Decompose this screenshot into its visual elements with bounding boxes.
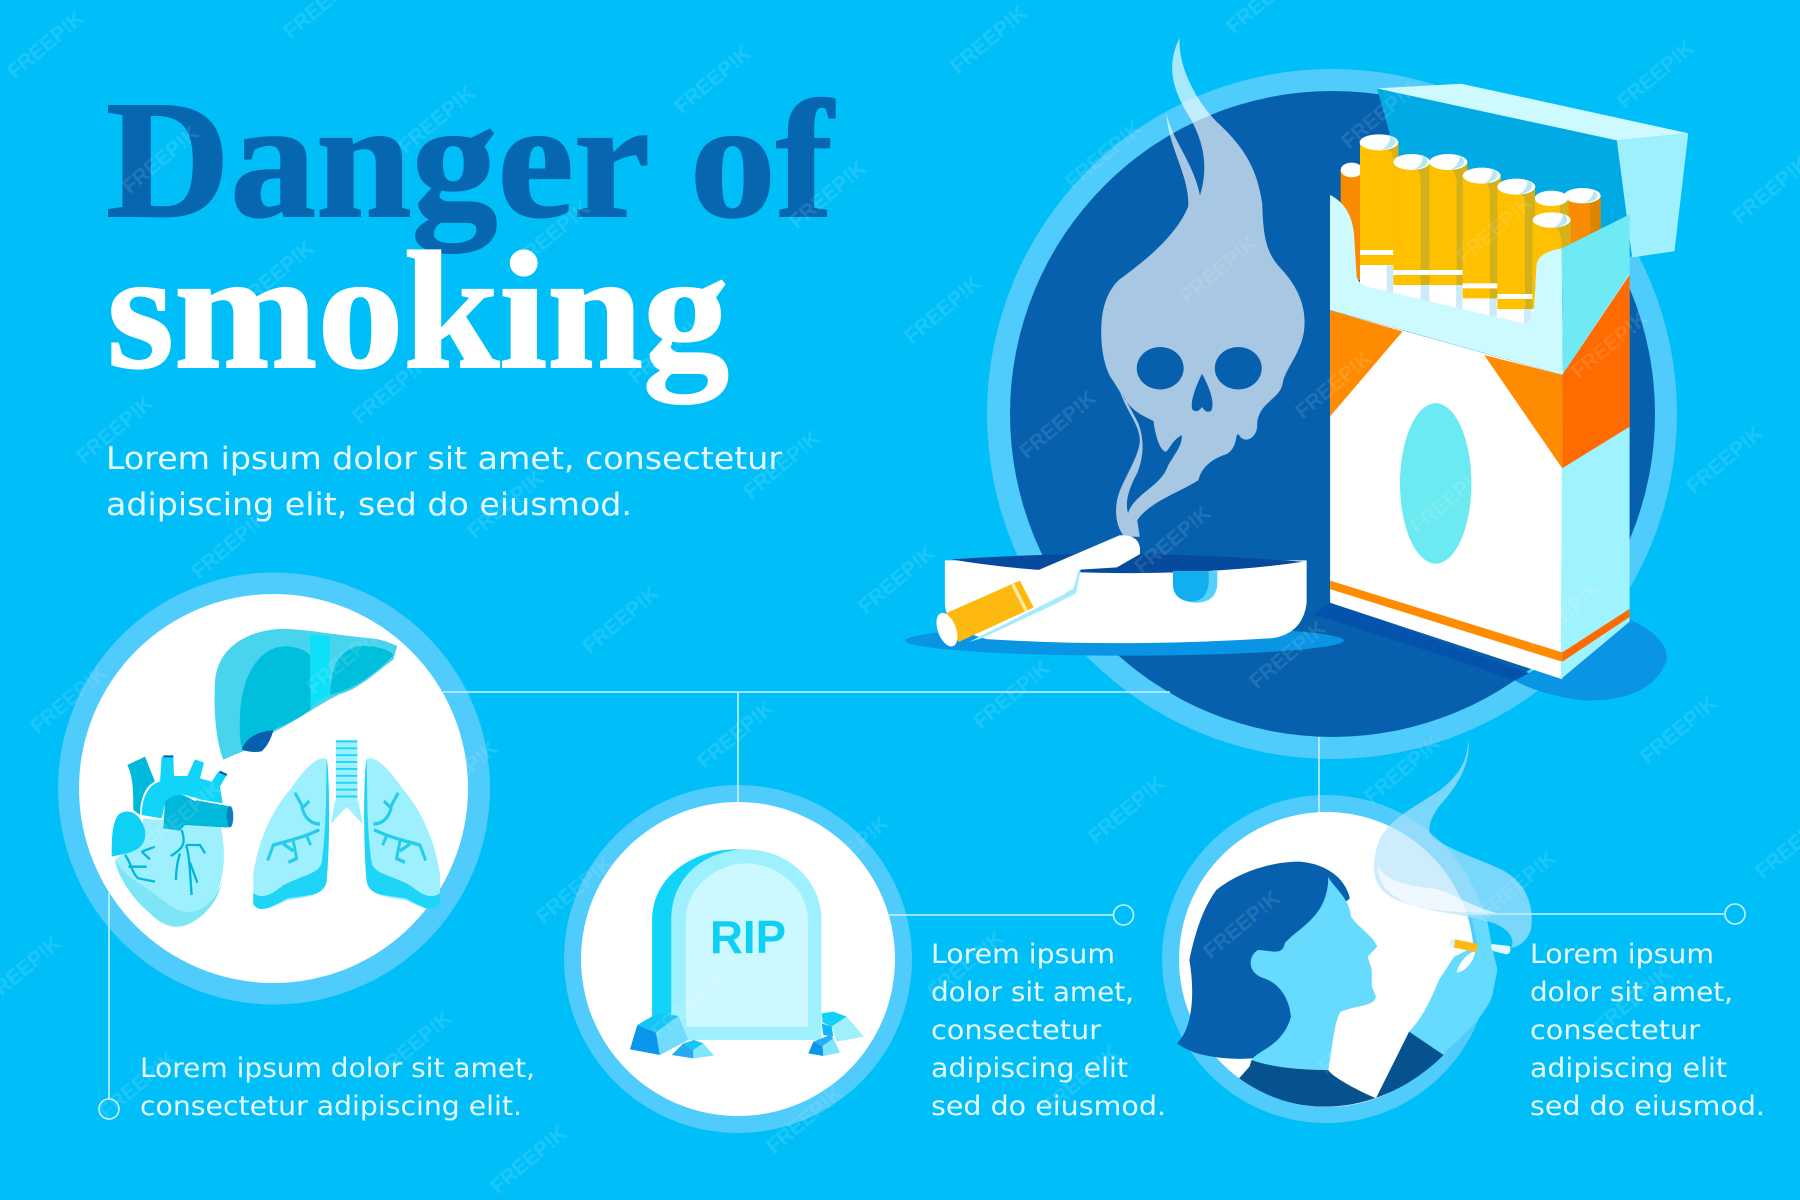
main circle	[987, 69, 1677, 759]
watermarks: FREEP!K	[946, 2, 1032, 78]
title	[106, 67, 835, 404]
RIP label: RIP	[710, 911, 786, 963]
watermarks: FREEP!K	[1061, 117, 1147, 193]
text block: gravestone: adipiscing elit	[931, 1053, 1128, 1084]
watermarks: FREEP!K	[854, 542, 940, 618]
watermarks: FREEP!K	[1452, 192, 1538, 268]
watermarks: FREEP!K	[95, 1047, 181, 1123]
watermarks: FREEP!K	[739, 427, 825, 503]
pack front face	[1330, 310, 1562, 679]
hair	[1177, 862, 1350, 1059]
text block: gravestone	[931, 939, 1166, 1122]
panel: gravestone	[564, 785, 912, 1133]
title line: Danger of: Danger of	[106, 67, 835, 253]
organs circle	[58, 572, 490, 1004]
watermarks: FREEP!K	[762, 1082, 848, 1158]
watermarks: FREEP!K	[141, 777, 227, 853]
skull gaps	[1122, 393, 1182, 513]
icon: gravestone	[652, 849, 821, 1040]
watermarks: FREEP!K	[72, 392, 158, 468]
watermarks: FREEP!K	[26, 662, 112, 738]
pack oval	[1400, 403, 1471, 564]
watermarks: FREEP!K	[486, 1122, 572, 1198]
watermarks: FREEP!K	[417, 737, 503, 813]
smoke skull	[1101, 38, 1305, 537]
orange stripe	[1330, 581, 1562, 662]
watermarks: FREEP!K	[624, 312, 710, 388]
watermarks: FREEP!K	[1038, 1042, 1124, 1118]
pack front flap	[1330, 195, 1563, 375]
face	[1251, 877, 1377, 1070]
text block: gravestone: Lorem ipsum	[931, 939, 1115, 970]
intro text	[106, 441, 782, 523]
watermarks: FREEP!K	[1337, 77, 1423, 153]
ashtray shadow	[905, 625, 1344, 656]
text block: smoker: sed do eiusmod.	[1530, 1091, 1765, 1122]
text block: smoker: Lorem ipsum	[1530, 939, 1714, 970]
smoke from cigarette	[1374, 740, 1532, 948]
watermarks: FREEP!K	[1682, 422, 1768, 498]
intro text: Lorem ipsum dolor sit amet, consectetur	[106, 441, 782, 477]
pack lid	[1377, 84, 1688, 140]
watermarks: FREEP!K	[118, 122, 204, 198]
text block: smoker: adipiscing elit	[1530, 1053, 1727, 1084]
watermarks: FREEP!K	[1314, 1002, 1400, 1078]
text block: organs: Lorem ipsum dolor sit amet,	[140, 1053, 535, 1084]
smoker circle	[1162, 795, 1490, 1123]
main illustration: smoke skull, ashtray and cigarette pack	[905, 38, 1688, 759]
watermarks: FREEP!K	[1613, 37, 1699, 113]
pack side face	[1561, 272, 1630, 679]
watermarks: FREEP!K	[1291, 347, 1377, 423]
watermarks: FREEP!K	[693, 697, 779, 773]
watermarks: FREEP!K	[578, 582, 664, 658]
bronchi	[331, 801, 363, 824]
text block: gravestone: sed do eiusmod.	[931, 1091, 1166, 1122]
watermarks: FREEP!K	[1590, 962, 1676, 1038]
panel: smoker	[1162, 740, 1532, 1123]
watermarks: FREEP!K	[256, 892, 342, 968]
watermarks: FREEP!K	[1245, 617, 1331, 693]
watermarks: FREEP!K	[1015, 387, 1101, 463]
watermarks: FREEP!K	[1176, 232, 1262, 308]
icon: lungs	[253, 740, 440, 909]
text block: smoker: dolor sit amet,	[1530, 977, 1733, 1008]
intro text: adipiscing elit, sed do eiusmod.	[106, 487, 632, 523]
icon: heart	[112, 755, 233, 927]
watermarks: FREEP!K	[302, 622, 388, 698]
text block: organs: consectetur adipiscing elit.	[140, 1091, 522, 1122]
rocks	[630, 1012, 864, 1058]
skull nose	[1192, 374, 1212, 412]
left lung	[253, 758, 329, 909]
watermarks: FREEP!K	[187, 507, 273, 583]
ashtray	[905, 554, 1344, 656]
watermarks: FREEP!K	[647, 967, 733, 1043]
watermarks: FREEP!K	[1360, 732, 1446, 808]
cigarette pack	[1313, 84, 1688, 701]
pack shadows	[1313, 603, 1530, 681]
text block: organs	[140, 1053, 535, 1122]
cigarette in ashtray	[932, 535, 1140, 649]
watermarks: FREEP!K	[509, 197, 595, 273]
watermarks: FREEP!K	[1567, 307, 1653, 383]
ashtray notch	[1173, 571, 1217, 603]
watermarks: FREEP!K	[1475, 847, 1561, 923]
shirt	[1239, 1032, 1444, 1107]
title line: smoking: smoking	[107, 218, 729, 404]
watermarks: FREEP!K	[670, 42, 756, 118]
watermarks: FREEP!K	[1406, 462, 1492, 538]
panel: organs	[58, 572, 490, 1004]
right lung	[364, 758, 440, 909]
watermarks: FREEP!K	[1636, 692, 1722, 768]
watermarks: FREEP!K	[371, 1007, 457, 1083]
watermarks: FREEP!K	[969, 657, 1055, 733]
watermarks: FREEP!K	[785, 157, 871, 233]
watermarks: FREEP!K	[923, 927, 1009, 1003]
trachea	[336, 740, 357, 801]
text block: smoker	[1530, 939, 1765, 1122]
icon: liver	[215, 629, 397, 760]
gravestone circle	[564, 785, 912, 1133]
watermarks: FREEP!K	[348, 352, 434, 428]
watermarks: FREEP!K	[808, 812, 894, 888]
watermarks: FREEP!K	[463, 467, 549, 543]
watermarks: FREEP!K	[1199, 887, 1285, 963]
pack interior	[1349, 88, 1632, 284]
orange label	[1330, 310, 1403, 416]
watermarks: FREEP!K	[233, 237, 319, 313]
text block: smoker: consectetur	[1530, 1015, 1701, 1046]
connector lines	[99, 692, 1745, 1119]
skull eyes	[1137, 347, 1184, 389]
text block: gravestone: dolor sit amet,	[931, 977, 1134, 1008]
watermarks: FREEP!K	[1084, 772, 1170, 848]
watermarks: FREEP!K	[1521, 577, 1607, 653]
watermarks: FREEP!K	[532, 852, 618, 928]
watermarks: FREEP!K	[1130, 502, 1216, 578]
arm and hand	[1409, 918, 1497, 1055]
cigarette in hand	[1450, 939, 1510, 973]
text block: gravestone: consectetur	[931, 1015, 1102, 1046]
watermarks: FREEP!K	[3, 7, 89, 83]
cigarettes and pack flap	[1330, 134, 1630, 375]
watermarks: FREEP!K	[394, 82, 480, 158]
watermarks: FREEP!K	[900, 272, 986, 348]
